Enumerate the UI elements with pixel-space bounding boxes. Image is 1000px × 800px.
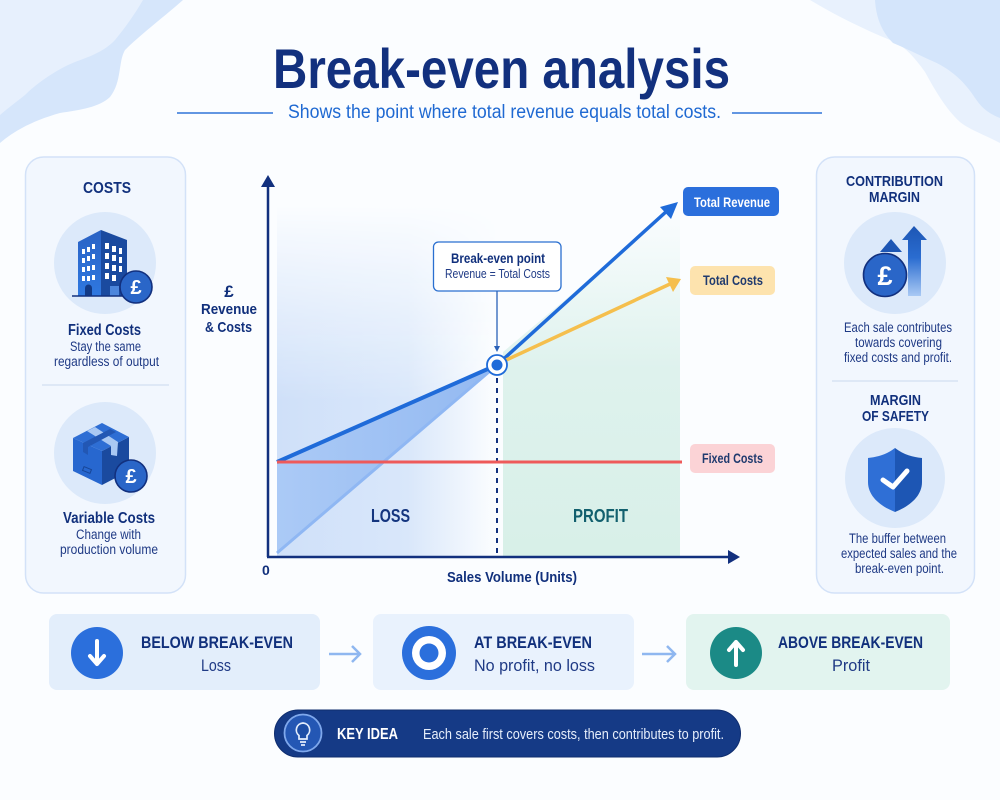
subtitle: Shows the point where total revenue equals total costs. [288,102,721,123]
variable cost line [277,371,490,553]
zero label: 0 [262,562,270,578]
panel: at break-even [373,614,634,690]
icon: target [402,626,456,680]
fixed costs text: Stay the same [70,339,141,354]
break-even marker [487,355,507,375]
callout: break-even point: Break-even point [451,251,545,266]
contribution margin text: towards covering [855,335,942,350]
arrow: below to at [329,646,360,662]
loss wedge [277,365,495,553]
label: fixed costs: Fixed Costs [702,451,763,466]
contribution margin text: Each sale contributes [844,320,952,335]
y axis label [201,282,257,336]
title: Break-even analysis [273,37,730,100]
callout arrow [494,291,500,352]
callout: break-even point [434,242,561,291]
icon: up arrow [710,627,762,679]
y axis label: Revenue [201,301,257,318]
icon: building with pound badge [54,212,156,314]
icon: box with pound badge [54,402,156,504]
below break-even text: Loss [201,656,231,675]
above break-even text [778,634,923,675]
loss label: LOSS [371,505,410,526]
panel: costs [26,157,186,593]
margin of safety text: break-even point. [855,561,944,576]
lower revenue line [277,368,490,462]
icon: shield with check [845,428,945,528]
contribution margin text [844,320,952,365]
label: total costs: Total Costs [703,273,763,288]
icon: down arrow [71,627,123,679]
break-even dashed line [496,378,498,556]
margin of safety text: expected sales and the [841,546,957,561]
margin of safety text [841,531,957,576]
y axis [261,175,275,557]
icon: building with pound badge: £ [130,277,142,299]
loss area background [277,240,474,556]
panel: below break-even [49,614,320,690]
label: total revenue [683,187,779,216]
at break-even text: AT BREAK-EVEN [474,634,592,652]
break-even chart [201,175,779,586]
above break-even text: ABOVE BREAK-EVEN [778,634,923,652]
at break-even text [474,634,595,675]
margin of safety text: The buffer between [849,531,946,546]
arrow: at to above [642,646,675,662]
key idea text: Each sale first covers costs, then contributes to profit. [423,727,724,743]
x axis [267,550,740,564]
icon: coin with arrows: £ [877,261,893,291]
panel: contribution margin and margin of safety [816,157,974,593]
profit area [503,203,680,556]
at break-even text: No profit, no loss [474,656,595,675]
costs heading: COSTS [83,180,131,197]
profit label: PROFIT [573,505,629,526]
below break-even text [141,634,293,675]
contribution margin text: fixed costs and profit. [844,350,952,365]
variable costs text: Variable Costs [63,510,155,527]
label: fixed costs [690,444,775,473]
contribution margin heading [846,173,943,206]
callout: break-even point: Revenue = Total Costs [445,267,550,281]
total revenue arrow [497,202,678,365]
label: total costs [690,266,775,295]
x axis label: Sales Volume (Units) [447,570,577,586]
fixed costs text: regardless of output [54,354,159,369]
key idea label: KEY IDEA [337,726,398,743]
variable costs text [60,510,158,557]
fixed costs text [54,322,159,369]
margin of safety heading: OF SAFETY [862,408,929,425]
panel: above break-even [686,614,950,690]
y axis label: & Costs [205,319,252,336]
variable costs text: production volume [60,542,158,557]
variable costs text: Change with [76,527,141,542]
fixed costs line [277,460,682,464]
contribution margin heading: MARGIN [869,189,920,206]
below break-even text: BELOW BREAK-EVEN [141,634,293,652]
fixed costs text: Fixed Costs [68,322,141,339]
y axis label: £ [224,282,234,301]
key idea banner [274,710,740,757]
label: total revenue: Total Revenue [694,195,770,210]
margin of safety heading: MARGIN [870,392,921,409]
contribution margin heading: CONTRIBUTION [846,173,943,190]
above break-even text: Profit [832,656,870,675]
icon: coin with arrows [844,212,946,314]
total costs arrow [504,277,681,361]
icon: box with pound badge: £ [125,466,137,488]
background shapes [0,0,1000,143]
margin of safety heading [862,392,929,425]
icon: light bulb [284,714,322,752]
